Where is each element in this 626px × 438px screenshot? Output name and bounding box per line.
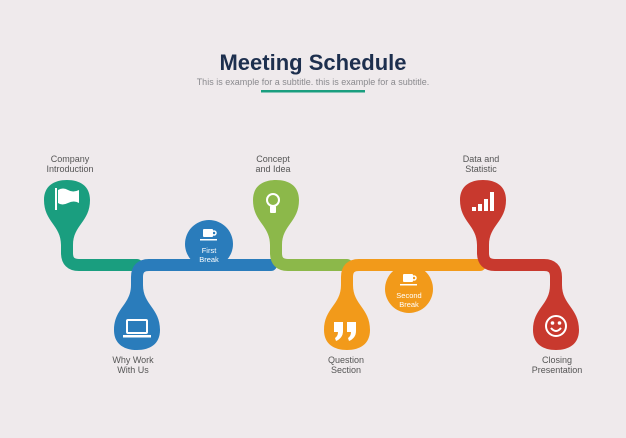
drop: why work with us — [114, 285, 160, 350]
label: question section: Section — [331, 365, 361, 375]
label: closing presentation: Presentation — [532, 365, 582, 375]
icon: light bulb — [267, 194, 279, 213]
label: company introduction: Introduction — [46, 164, 94, 174]
drop: data and statistic — [460, 180, 506, 245]
track: red — [483, 230, 556, 300]
drop: closing presentation — [533, 285, 579, 350]
second break circle — [385, 265, 433, 313]
icon: cup — [400, 274, 417, 286]
track: blue — [137, 265, 271, 300]
icon: laptop — [123, 320, 151, 338]
label: why work with us: Why Work — [112, 355, 154, 365]
title underline — [261, 90, 365, 92]
icon: flag — [55, 188, 79, 210]
label: question section: Question — [328, 355, 364, 365]
label: concept and idea: and Idea — [255, 164, 291, 174]
track: orange — [347, 265, 480, 300]
icon: smiley — [546, 316, 566, 336]
track: green — [67, 230, 137, 265]
icon: cup — [200, 229, 217, 240]
drop: company introduction — [44, 180, 90, 245]
label: closing presentation: Closing — [542, 355, 572, 365]
first break circle — [185, 220, 233, 268]
second break circle: Second — [396, 291, 422, 300]
icon: quote — [334, 322, 356, 341]
icon: bar chart — [472, 192, 494, 211]
title: Meeting Schedule — [219, 50, 407, 75]
drop: question section — [324, 285, 370, 350]
subtitle: This is example for a subtitle. this is example for a subtitle. — [197, 77, 429, 87]
drop: concept and idea — [253, 180, 299, 245]
first break circle: First — [202, 246, 217, 255]
label: why work with us: With Us — [117, 365, 149, 375]
first break circle: Break — [199, 255, 219, 264]
track: olive — [276, 230, 347, 265]
label: data and statistic: Data and — [463, 154, 499, 164]
label: data and statistic: Statistic — [465, 164, 497, 174]
second break circle: Break — [399, 300, 419, 309]
label: company introduction: Company — [51, 154, 90, 164]
label: concept and idea: Concept — [256, 154, 290, 164]
